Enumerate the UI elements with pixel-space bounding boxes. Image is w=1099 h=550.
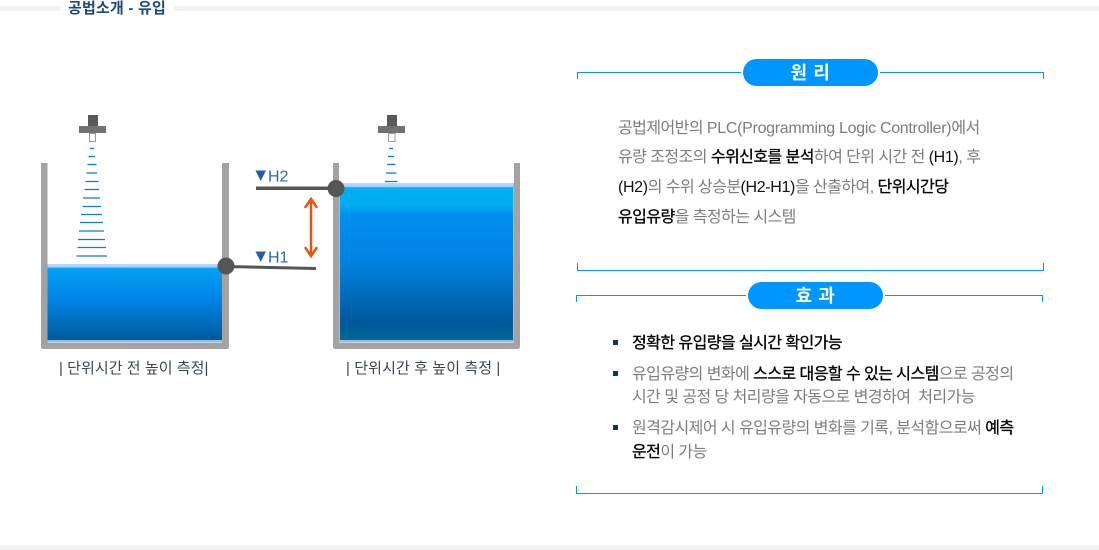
bullet 1: 정확한 유입량을 실시간 확인가능 xyxy=(632,335,842,352)
principle text: 공법제어반의 PLC(Programming Logic Controller)에서 xyxy=(618,120,980,137)
bullet 2 xyxy=(613,365,1014,406)
heading: effects: 효 과 xyxy=(796,286,835,306)
diagram: level measurement tanks xyxy=(41,115,520,349)
heading: principle: 원 리 xyxy=(791,63,830,83)
caption: before: | 단위시간 전 높이 측정| xyxy=(59,360,208,377)
principle text: 유입유량을 측정하는 시스템 xyxy=(618,209,796,226)
principle text xyxy=(618,120,980,226)
heading: principle xyxy=(743,59,878,86)
bullet 3: 원격감시제어 시 유입유량의 변화를 기록, 분석함으로써 예측 xyxy=(632,420,1014,437)
bullet 2: 유입유량의 변화에 스스로 대응할 수 있는 시스템으로 공정의 xyxy=(632,366,1014,383)
level line H1 xyxy=(218,258,316,274)
panel: principle xyxy=(577,59,1044,271)
title: 공법소개 - 유입 xyxy=(68,0,166,17)
principle text: 유량 조정조의 수위신호를 분석하여 단위 시간 전 (H1), 후 xyxy=(618,149,980,166)
label H2: H2 xyxy=(268,168,289,186)
arrow: level rise between H1 and H2 xyxy=(306,199,316,256)
ultrasonic waves 2 xyxy=(385,148,398,182)
bullet 2: 시간 및 공정 당 처리량을 자동으로 변경하여 처리가능 xyxy=(632,389,975,406)
sensor 2 xyxy=(378,115,405,142)
bottom divider bar xyxy=(0,545,1099,550)
label H2 xyxy=(256,168,289,186)
top divider bar xyxy=(0,6,1099,11)
caption: after: | 단위시간 후 높이 측정 | xyxy=(346,360,500,377)
label H1: H1 xyxy=(268,250,289,266)
tank 1 (before) xyxy=(41,163,229,349)
panel: effects xyxy=(576,282,1043,494)
principle text: (H2)의 수위 상승분(H2-H1)을 산출하여, 단위시간당 xyxy=(618,179,948,196)
label H1 xyxy=(256,250,289,266)
bullet 3 xyxy=(613,419,1014,461)
tank 2 (after) xyxy=(333,163,520,349)
ultrasonic waves 1 xyxy=(76,148,107,256)
heading: effects xyxy=(748,282,883,309)
sensor 1 xyxy=(79,115,106,142)
level line H2 xyxy=(256,180,344,197)
bullet 3: 운전이 가능 xyxy=(632,444,707,461)
